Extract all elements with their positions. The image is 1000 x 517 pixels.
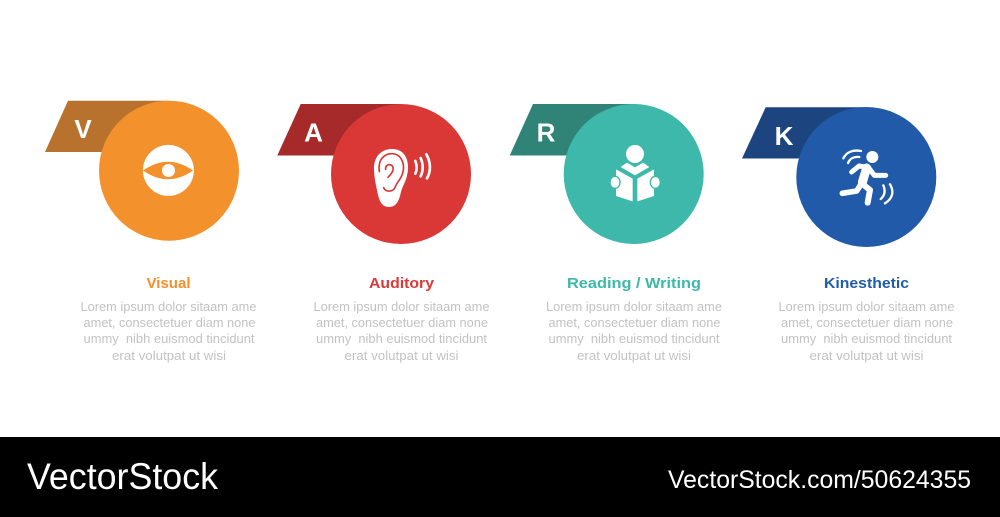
text block: Kinesthetic description: Lorem ipsum dolor sitaam ame — [778, 299, 954, 314]
panel: Visual — [45, 101, 256, 363]
heading: Auditory: Auditory — [369, 275, 435, 292]
circle: Reading / Writing — [564, 104, 704, 244]
circle: Visual — [99, 101, 239, 241]
heading: Kinesthetic: Kinesthetic — [824, 275, 909, 292]
text block: Reading / Writing description: amet, consectetuer diam none — [548, 315, 720, 330]
text block: Visual description: Lorem ipsum dolor sitaam ame — [80, 299, 256, 314]
icon: person reading book — [609, 145, 661, 201]
text block: Visual description: amet, consectetuer diam none — [84, 315, 256, 330]
text block: Reading / Writing description: erat volutpat ut wisi — [577, 348, 691, 363]
text block: Auditory description — [314, 299, 490, 363]
icon: running person — [842, 151, 892, 203]
icon: ear — [374, 149, 430, 207]
panel: Reading / Writing — [510, 104, 722, 363]
text block: Kinesthetic description: amet, consectetuer diam none — [781, 315, 953, 330]
tab: A — [277, 104, 401, 156]
text block: Auditory description: erat volutpat ut wisi — [344, 348, 459, 363]
panel: Auditory — [277, 104, 490, 363]
heading: Visual: Visual — [146, 275, 190, 292]
text block: Reading / Writing description: Lorem ipsum dolor sitaam ame — [546, 299, 722, 314]
tab: K — [742, 107, 866, 158]
circle: Kinesthetic — [796, 107, 936, 247]
tab: A: A — [304, 118, 323, 148]
text block: Auditory description: Lorem ipsum dolor sitaam ame — [314, 299, 490, 314]
text block: Kinesthetic description: erat volutpat ut wisi — [810, 348, 924, 363]
text block: Reading / Writing description: ummy nibh euismod tincidunt — [548, 331, 720, 346]
text block: Auditory description: amet, consectetuer diam none — [316, 315, 488, 330]
tab: V — [45, 101, 169, 152]
tab: R: R — [537, 118, 556, 148]
footer banner — [0, 437, 1000, 517]
tab: K: K — [775, 121, 794, 151]
icon: eye — [143, 145, 194, 196]
panel: Kinesthetic — [742, 107, 954, 363]
tab: R — [510, 104, 634, 156]
circle: Auditory — [331, 104, 471, 244]
text block: Auditory description: ummy nibh euismod tincidunt — [316, 331, 487, 346]
text block: Visual description: erat volutpat ut wisi — [112, 348, 226, 363]
image reference url: VectorStock.com/50624355 — [668, 466, 971, 494]
text block: Kinesthetic description — [778, 299, 954, 363]
text block: Kinesthetic description: ummy nibh euismod tincidunt — [781, 331, 952, 346]
text block: Visual description — [80, 299, 256, 363]
text block: Reading / Writing description — [546, 299, 722, 363]
heading: Reading / Writing: Reading / Writing — [567, 275, 701, 292]
brand name: VectorStock — [27, 456, 218, 497]
tab: V: V — [74, 114, 92, 144]
text block: Visual description: ummy nibh euismod tincidunt — [84, 331, 255, 346]
